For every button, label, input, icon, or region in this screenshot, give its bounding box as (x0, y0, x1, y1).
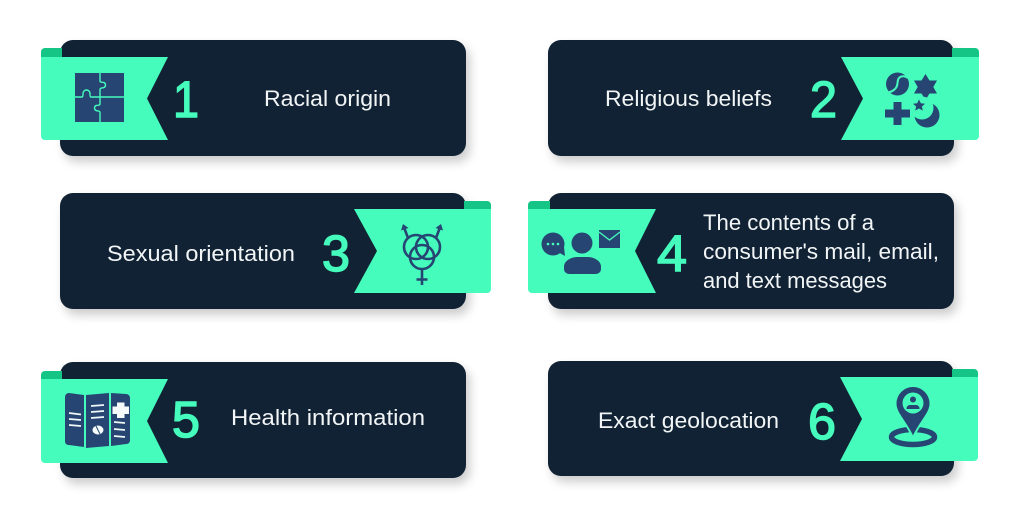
label: Racial origin (264, 86, 391, 111)
panel: religious beliefs (548, 40, 979, 162)
ribbon (841, 57, 979, 140)
ribbon (528, 209, 656, 293)
number 6: 6 (808, 393, 836, 450)
label: and text messages (703, 268, 887, 293)
ribbon (354, 209, 491, 293)
ribbon (41, 379, 168, 463)
label (703, 210, 939, 293)
number 3: 3 (322, 225, 350, 282)
icon: person with messages (542, 230, 620, 274)
ribbon (840, 377, 978, 461)
label: Religious beliefs (605, 86, 772, 111)
number 1: 1 (173, 71, 199, 128)
label: Health information (231, 405, 425, 430)
icon: religious symbols (885, 72, 940, 128)
ribbon (41, 57, 168, 140)
label: Exact geolocation (598, 408, 779, 433)
panel: exact geolocation (548, 361, 978, 482)
number 5: 5 (172, 391, 200, 448)
number 2: 2 (810, 71, 837, 128)
label: The contents of a (703, 210, 875, 235)
icon: medical brochure (65, 393, 130, 448)
icon: location pin (892, 386, 934, 444)
icon: puzzle (75, 73, 124, 122)
label: consumer's mail, email, (703, 239, 939, 264)
label: Sexual orientation (107, 241, 295, 266)
panel: health information (41, 362, 470, 484)
panel: mail, email and text messages (528, 193, 958, 315)
panel: racial origin (41, 40, 470, 162)
icon: gender symbols (401, 224, 443, 285)
number 4: 4 (657, 225, 687, 282)
panel: sexual orientation (60, 193, 491, 315)
